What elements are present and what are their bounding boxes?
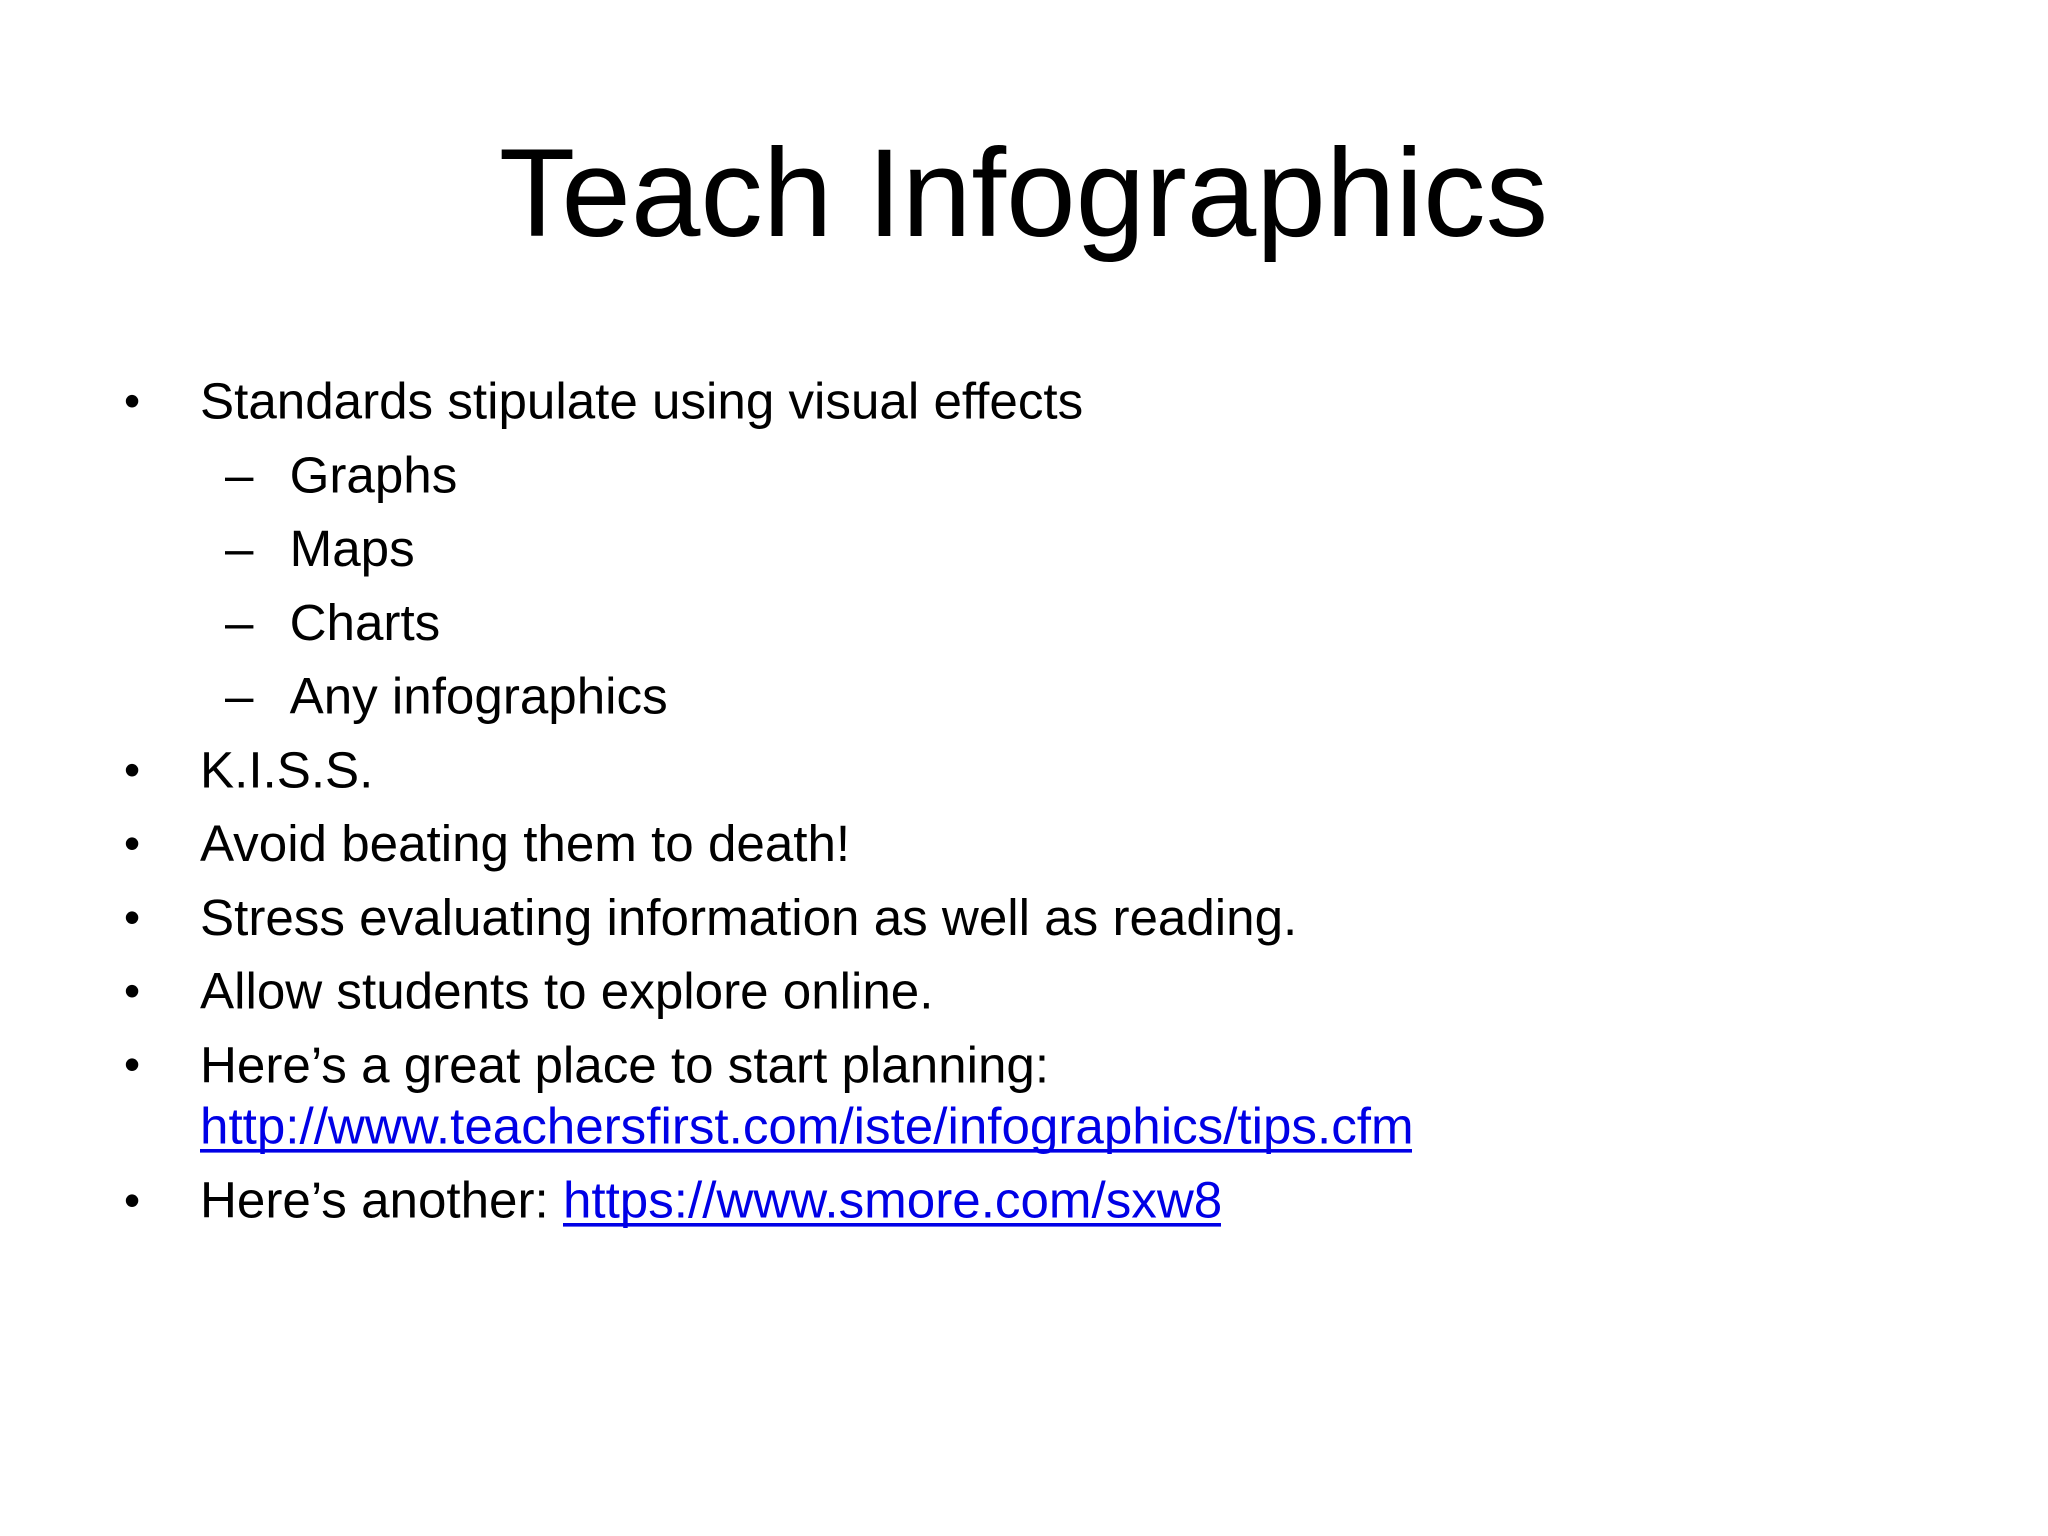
- title: Teach Infographics: [499, 124, 1548, 263]
- bullet: avoid beating: Avoid beating them to death!: [200, 815, 850, 872]
- sub-bullet: any infographics: –: [225, 668, 254, 725]
- sub-bullet: charts: Charts: [290, 594, 440, 651]
- bullet: KISS: •: [124, 744, 140, 796]
- bullet: planning link: [124, 1036, 1414, 1154]
- bullet: stress evaluating: •: [124, 891, 140, 943]
- bullet list: [124, 373, 1414, 1229]
- bullet: explore online: Allow students to explore online.: [200, 962, 933, 1020]
- bullet: planning link: •: [124, 1038, 140, 1090]
- sub-bullet: charts: [225, 594, 440, 651]
- bullet: visual effects: Standards stipulate using visual effects: [200, 373, 1083, 430]
- sub-bullet: maps: –: [225, 520, 254, 577]
- bullet: KISS: [124, 741, 373, 798]
- sub-bullet: maps: Maps: [290, 520, 415, 577]
- sub-bullet: graphs: Graphs: [290, 447, 457, 504]
- sub-bullet: graphs: –: [225, 447, 254, 504]
- sub-bullet: any infographics: Any infographics: [290, 668, 668, 725]
- sub-bullet: maps: [225, 520, 415, 577]
- bullet: another link: Here’s another: https://www.smore.com/sxw8: [200, 1172, 1222, 1228]
- bullet: avoid beating: •: [124, 817, 140, 869]
- bullet: explore online: •: [124, 964, 140, 1016]
- bullet: stress evaluating: Stress evaluating information as well as reading.: [200, 889, 1297, 946]
- bullet: another link: •: [124, 1174, 140, 1226]
- bullet: planning link: Here’s a great place to start planning:: [200, 1036, 1049, 1093]
- bullet: visual effects: •: [124, 374, 140, 426]
- bullet: planning link: http://www.teachersfirst.com/iste/infographics/tips.cfm: [200, 1098, 1414, 1154]
- sub-bullet: charts: –: [225, 594, 254, 651]
- bullet: KISS: K.I.S.S.: [200, 741, 373, 798]
